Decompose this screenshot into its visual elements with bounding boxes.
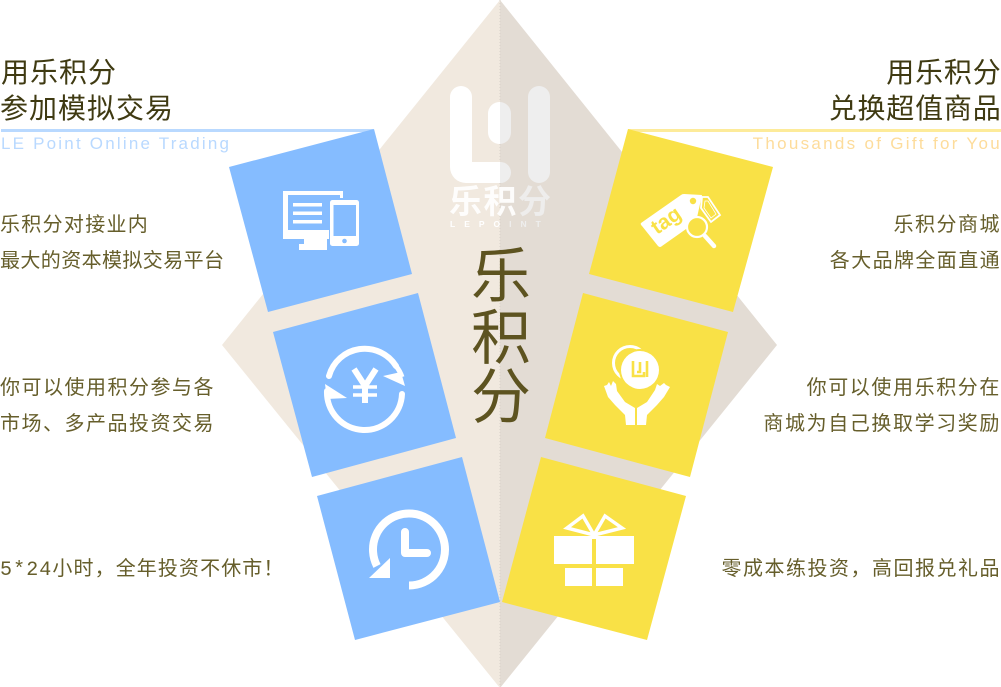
icon: hands holding coin: [604, 346, 670, 425]
background kite shape: [222, 0, 777, 687]
left text block 1: 乐积分对接业内: [0, 213, 149, 236]
left heading: [0, 57, 174, 124]
logo wordmark: 乐积分: [449, 183, 552, 220]
left heading: 用乐积分: [1, 57, 117, 88]
center vertical title: 分: [471, 364, 531, 431]
right text block 1: [830, 213, 1001, 272]
right text block 1: 各大品牌全面直通: [830, 249, 1001, 272]
icon: gift tag with magnifier: [641, 194, 720, 247]
right text block 2: 商城为自己换取学习奖励: [763, 412, 1001, 435]
left text block 1: [0, 213, 224, 272]
right text block 1: 乐积分商城: [894, 213, 1001, 236]
logo: [449, 86, 552, 229]
panel: yellow card tag: [589, 129, 773, 312]
icon: yen exchange: [325, 349, 405, 430]
center vertical title: [471, 243, 531, 431]
panel: left header: [0, 57, 373, 153]
right heading: [829, 57, 1001, 124]
right heading: 兑换超值商品: [829, 93, 1001, 124]
icon: gift box: [554, 516, 634, 586]
left text block 2: 市场、多产品投资交易: [0, 412, 215, 435]
center vertical title: 乐: [471, 243, 531, 310]
logo sub wordmark: LEPOINT: [450, 219, 550, 229]
left text block 2: 你可以使用积分参与各: [0, 376, 215, 399]
panel: right header: [628, 57, 1001, 153]
logo mark: [450, 86, 550, 183]
right text block 2: [763, 376, 1001, 435]
right rule: [628, 129, 1001, 132]
panel: blue card devices: [229, 129, 412, 312]
icon: gift tag with magnifier: tag: [647, 202, 686, 239]
right text block 3: 零成本练投资，高回报兑礼品: [722, 557, 1001, 580]
panel: yellow card coin: [545, 293, 728, 477]
icon: clock: [369, 514, 445, 586]
center vertical title: 积: [471, 305, 531, 372]
right heading: 用乐积分: [886, 57, 1001, 88]
left text block 2: [0, 376, 215, 435]
right subtitle: Thousands of Gift for You: [753, 134, 1001, 153]
left heading: 参加模拟交易: [0, 93, 174, 124]
left rule: [1, 129, 373, 132]
left text block 1: 最大的资本模拟交易平台: [0, 249, 224, 272]
left subtitle: LE Point Online Trading: [1, 134, 231, 153]
left text block 3: 5*24小时，全年投资不休市！: [0, 557, 285, 582]
panel: yellow card gift: [502, 457, 686, 640]
icon: monitor and phone: [283, 191, 359, 250]
right text block 2: 你可以使用乐积分在: [807, 376, 1001, 399]
panel: blue card clock: [317, 457, 500, 640]
panel: blue card exchange: [273, 293, 456, 477]
